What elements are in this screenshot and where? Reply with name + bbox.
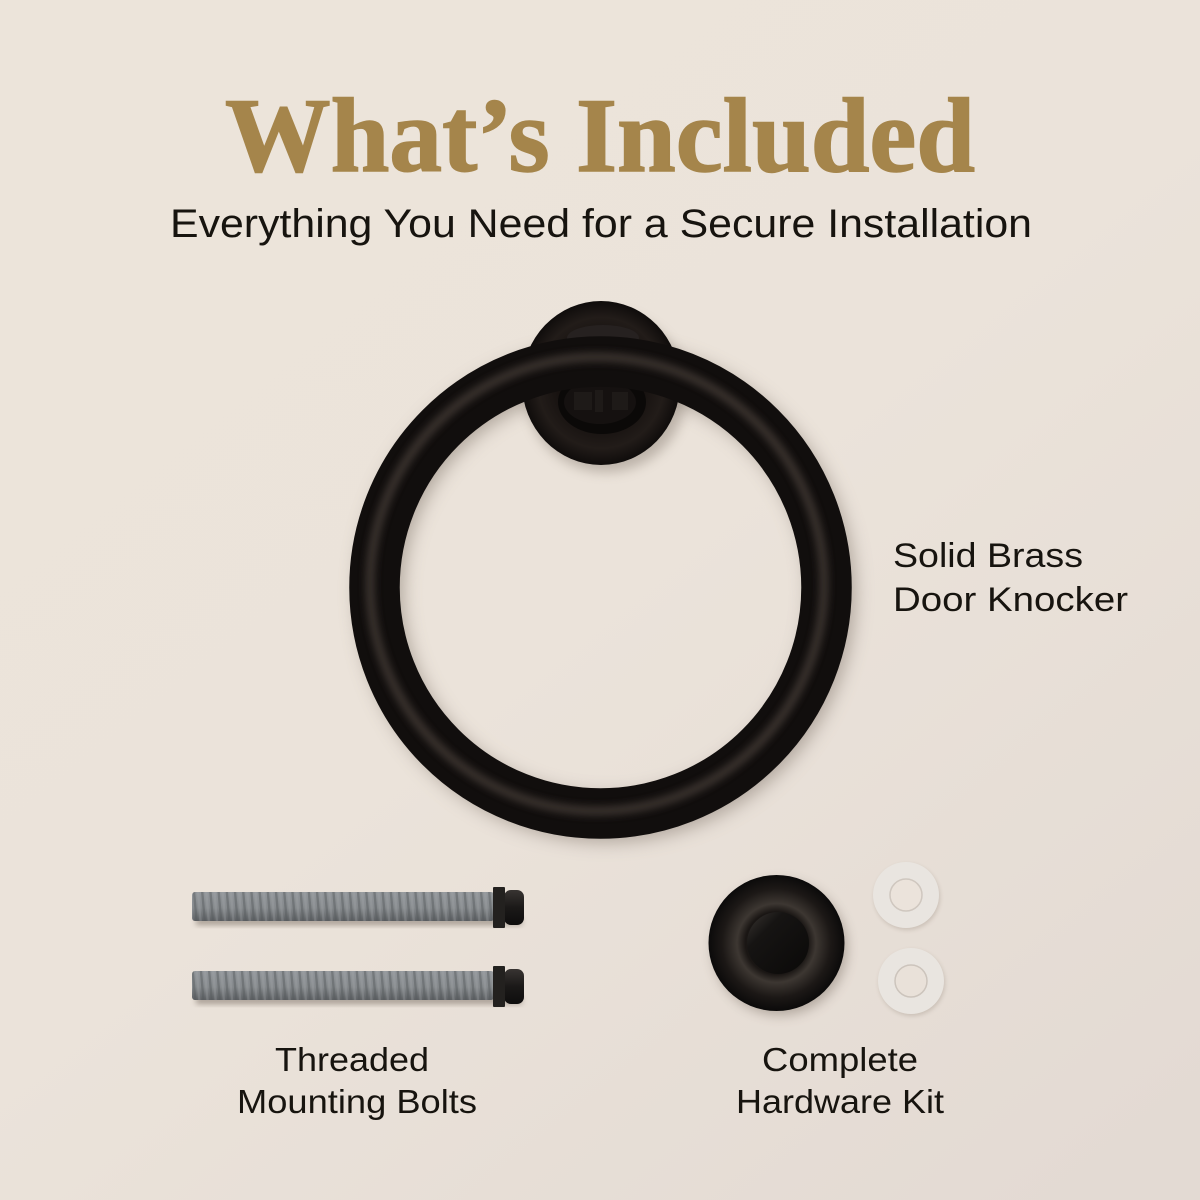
label: knocker: Solid Brass	[893, 537, 1083, 575]
rosette	[708, 875, 847, 1015]
bolt 2	[192, 966, 524, 1007]
label: knocker: Door Knocker	[893, 581, 1128, 619]
hardware kit	[708, 862, 945, 1016]
bolt 1	[192, 887, 524, 928]
label: bolts	[237, 1041, 477, 1120]
label: hardware kit: Hardware Kit	[736, 1083, 944, 1120]
label: hardware kit: Complete	[762, 1041, 918, 1078]
ring	[370, 357, 826, 814]
label: bolts: Threaded	[275, 1041, 429, 1078]
title: What’s Included	[225, 77, 975, 194]
door knocker	[370, 301, 832, 819]
label: knocker	[893, 537, 1128, 619]
label: hardware kit	[736, 1041, 944, 1120]
knocker shadow	[380, 367, 832, 819]
mounting bolts	[192, 887, 524, 1007]
mounting plate	[522, 301, 686, 472]
washer 1	[873, 862, 940, 930]
label: bolts: Mounting Bolts	[237, 1083, 477, 1120]
washer 2	[878, 948, 945, 1016]
subtitle: Everything You Need for a Secure Installation	[170, 202, 1032, 246]
